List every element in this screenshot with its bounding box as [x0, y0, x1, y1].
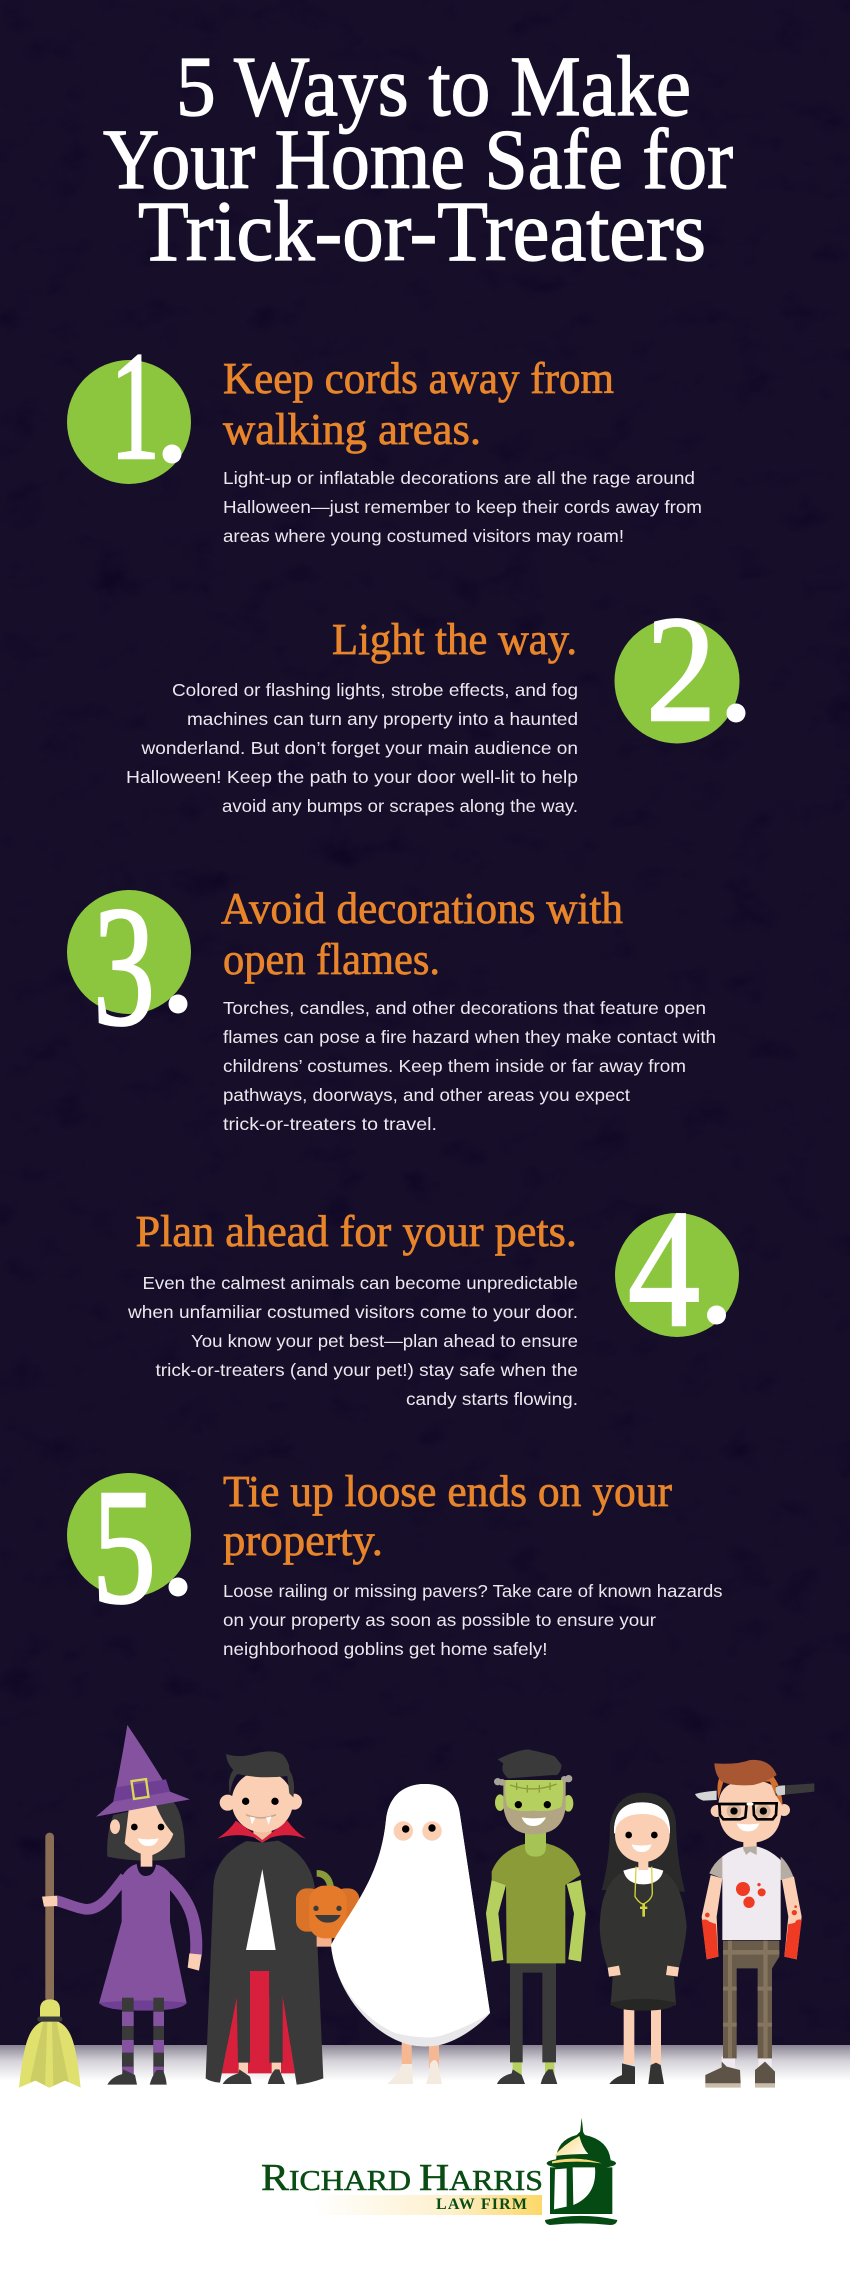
- step 2 body text: wonderland. But don’t forget your main audience on: [140, 738, 578, 758]
- step 4 body text: trick-or-treaters (and your pet!) stay safe when the: [156, 1360, 578, 1380]
- frankenstein: [486, 1749, 586, 2084]
- number badge 5: [67, 1455, 191, 1638]
- gold bar: [313, 2195, 542, 2215]
- step 4: [127, 1176, 739, 1409]
- step 3 body text: flames can pose a fire hazard when they make contact with: [223, 1027, 716, 1047]
- witch: [42, 1725, 202, 2085]
- title: [103, 38, 733, 279]
- logo: Richard Harris Law Firm: [261, 2118, 617, 2225]
- number badge 3: [67, 872, 191, 1062]
- step 3 heading: Avoid decorations with: [221, 884, 623, 933]
- number badge 4: 4: [628, 1176, 700, 1362]
- step 1 body text: Light-up or inflatable decorations are all the rage around: [223, 468, 695, 488]
- step 5: [67, 1455, 723, 1659]
- step 3 heading: open flames.: [223, 935, 440, 984]
- step 3 body text: Torches, candles, and other decorations that feature open: [223, 998, 706, 1018]
- ghost: [331, 1784, 490, 2084]
- step 2 body text: avoid any bumps or scrapes along the way.: [222, 796, 578, 816]
- vampire: [206, 1751, 323, 2085]
- nun: [600, 1793, 687, 2084]
- step 1 heading: walking areas.: [223, 405, 481, 454]
- number badge 1: 1: [110, 320, 160, 492]
- step 4 body text: when unfamiliar costumed visitors come to your door.: [127, 1302, 578, 1322]
- step 1 body text: areas where young costumed visitors may roam!: [223, 526, 624, 546]
- step 2 body text: Halloween! Keep the path to your door well-lit to help: [126, 767, 578, 787]
- step 1 body text: [223, 468, 702, 546]
- step 4 body text: You know your pet best—plan ahead to ensure: [191, 1331, 578, 1351]
- step 5 body text: neighborhood goblins get home safely!: [223, 1639, 548, 1659]
- step 4 heading: Plan ahead for your pets.: [136, 1207, 577, 1256]
- step 5 body text: [223, 1581, 723, 1659]
- illustration: costumed children, right half: [486, 1749, 814, 2088]
- step 3 body text: childrens’ costumes. Keep them inside or far away from: [223, 1056, 686, 1076]
- step 3 heading: [221, 884, 623, 984]
- number badge 2: 2: [646, 585, 716, 753]
- number badge 4: [615, 1176, 739, 1362]
- nerd with knife: [695, 1760, 814, 2088]
- title: 5 Ways to Make: [176, 38, 691, 134]
- icon: domed cupola: [545, 2118, 617, 2225]
- step 4 body text: [127, 1273, 578, 1409]
- step 5 heading: Tie up loose ends on your: [223, 1467, 672, 1516]
- number badge 5: 5: [92, 1455, 156, 1638]
- title: Trick-or-Treaters: [138, 183, 706, 279]
- step 2 heading: Light the way.: [332, 615, 577, 664]
- firm name: RICHARD HARRIS: [261, 2157, 543, 2199]
- step 1 body text: Halloween—just remember to keep their cords away from: [223, 497, 702, 517]
- step 2 body text: Colored or flashing lights, strobe effects, and fog: [172, 680, 578, 700]
- number badge 2: [614, 585, 746, 753]
- step 5 heading: [223, 1467, 672, 1565]
- step 5 body text: Loose railing or missing pavers? Take care of known hazards: [223, 1581, 723, 1601]
- broom: [19, 1833, 81, 2088]
- step 5 heading: property.: [223, 1516, 383, 1565]
- step 4 body text: candy starts flowing.: [406, 1389, 578, 1409]
- law firm label: LAW FIRM: [436, 2196, 527, 2213]
- step 3: [67, 872, 716, 1134]
- step 1 heading: Keep cords away from: [223, 354, 614, 403]
- number badge 3: 3: [93, 872, 155, 1062]
- step 1: [67, 320, 702, 546]
- step 3 body text: pathways, doorways, and other areas you expect: [223, 1085, 630, 1105]
- step 3 body text: [223, 998, 716, 1134]
- step 2: [126, 585, 746, 816]
- step 4 body text: Even the calmest animals can become unpredictable: [142, 1273, 578, 1293]
- title: Your Home Safe for: [103, 111, 733, 207]
- pumpkin: [296, 1873, 359, 1947]
- step 5 body text: on your property as soon as possible to ensure your: [223, 1610, 656, 1630]
- step 2 body text: machines can turn any property into a haunted: [187, 709, 578, 729]
- step 1 heading: [223, 354, 614, 454]
- number badge 1: [67, 320, 191, 492]
- ground band: [0, 2045, 850, 2081]
- step 2 body text: [126, 680, 578, 816]
- step 3 body text: trick-or-treaters to travel.: [223, 1114, 437, 1134]
- illustration: costumed children, left half: [19, 1725, 359, 2088]
